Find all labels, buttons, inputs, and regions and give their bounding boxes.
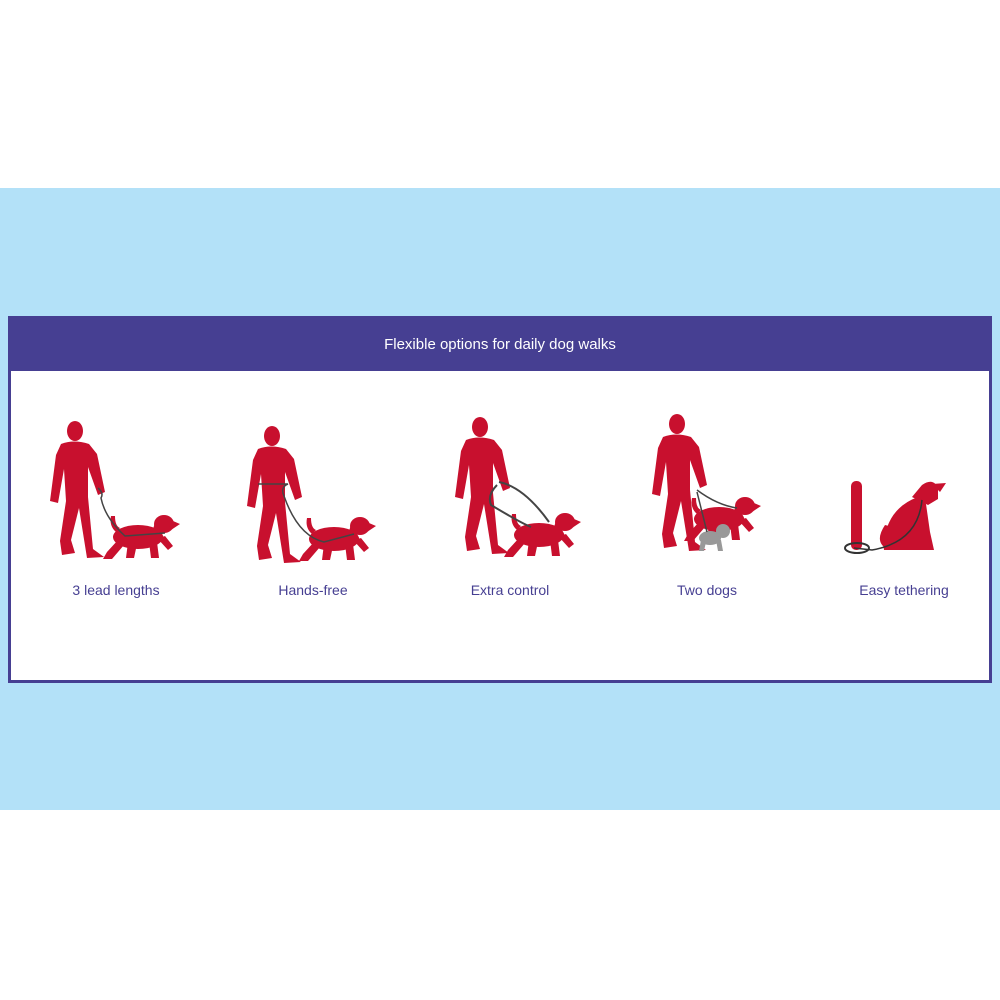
- label: 3 lead lengths: [72, 582, 160, 598]
- label: Hands-free: [278, 582, 348, 598]
- icon: two dogs: [652, 414, 761, 551]
- icon: hands-free: [247, 426, 376, 563]
- icon: easy tethering: [845, 481, 946, 553]
- icon: 3 lead lengths: [50, 421, 180, 559]
- title: Flexible options for daily dog walks: [384, 336, 616, 353]
- panel: options: [8, 316, 992, 683]
- label: Two dogs: [677, 582, 737, 598]
- title: [11, 319, 989, 371]
- background band: [0, 188, 1000, 810]
- label: Easy tethering: [859, 582, 949, 598]
- label: Extra control: [471, 582, 549, 598]
- icon: extra control: [455, 417, 581, 557]
